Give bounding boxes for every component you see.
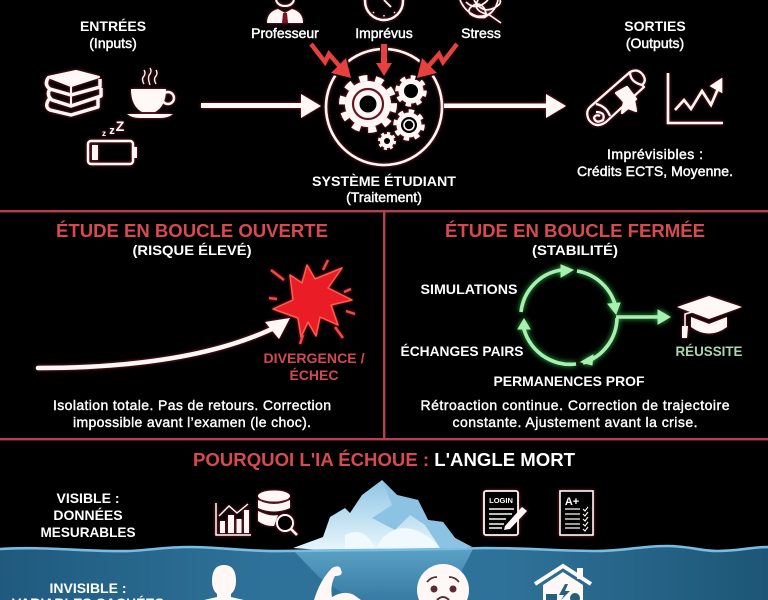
label: visible: VISIBLE :: [56, 490, 120, 506]
icon: low battery with sleep letters: z: [102, 129, 106, 138]
icon: flexed arm: [314, 566, 361, 600]
icon: diploma: [587, 71, 645, 125]
text: open loop description: [53, 397, 331, 430]
heading: inputs: [80, 18, 146, 51]
section dividers: [0, 210, 768, 440]
icon: worried face: [417, 564, 469, 600]
panel: open loop: [38, 220, 365, 430]
panel: iceberg blind spot: [0, 449, 768, 600]
icon: clock: [365, 0, 403, 20]
panel: closed loop: [400, 220, 742, 430]
water line: [0, 546, 768, 551]
icon: database search: [258, 490, 297, 535]
icon: graduation cap: [677, 296, 742, 338]
text: outputs: Crédits ECTS, Moyenne.: [577, 163, 733, 179]
icon: books: [46, 71, 101, 115]
text: closed loop description: Rétroaction continue. Correction de trajectoire: [420, 397, 730, 413]
text: open loop description: impossible avant l’examen (le choc).: [73, 414, 311, 430]
icon: tangled stress scribble: [460, 0, 501, 23]
heading: closed loop: (STABILITÉ): [532, 242, 618, 258]
icon: low battery with sleep letters: z: [109, 125, 115, 137]
arrow: professor lightning: [311, 44, 351, 78]
icon: bar chart: [216, 503, 251, 535]
iceberg: [293, 480, 472, 550]
label: divergence: DIVERGENCE /: [264, 350, 365, 366]
heading: blind spot: POURQUOI L'IA ÉCHOUE : L'ANGLE MORT: [193, 449, 575, 470]
perturbation: stress: [460, 0, 501, 41]
heading: inputs: (Inputs): [89, 35, 137, 51]
perturbation: professor: [251, 0, 319, 41]
heading: outputs: [624, 18, 686, 51]
label: system: SYSTÈME ÉTUDIANT: [312, 173, 456, 189]
heading: inputs: ENTRÉES: [80, 18, 146, 34]
arrow: diverging curve: [38, 318, 290, 368]
heading: closed loop: [445, 220, 705, 258]
icon: graded sheet: A+: [565, 496, 579, 508]
arrow: stress lightning: [417, 44, 457, 78]
icon: professor: [267, 0, 303, 23]
label: professor: Professeur: [251, 25, 319, 41]
icon: login document: [484, 491, 527, 535]
heading: outputs: (Outputs): [626, 35, 684, 51]
heading: open loop: [56, 220, 328, 258]
icon: graded sheet: [560, 491, 593, 535]
iceberg underwater: [293, 549, 473, 600]
label: invisible: INVISIBLE :: [49, 580, 127, 596]
text: open loop description: Isolation totale. Pas de retours. Correction: [53, 397, 331, 413]
label: unexpected: Imprévus: [355, 25, 413, 41]
label: peer exchange: ÉCHANGES PAIRS: [400, 343, 524, 359]
text: outputs: Imprévisibles :: [607, 146, 703, 162]
label: divergence: ÉCHEC: [289, 367, 339, 383]
arrow: system to outputs: [444, 94, 566, 118]
icon: explosion: [269, 260, 355, 344]
label: system: [312, 173, 456, 205]
label: visible: [40, 490, 136, 540]
panel: system inputs and outputs: [46, 0, 733, 205]
heading: open loop: ÉTUDE EN BOUCLE OUVERTE: [56, 220, 328, 241]
label: simulations: SIMULATIONS: [420, 281, 518, 297]
heading: closed loop: ÉTUDE EN BOUCLE FERMÉE: [445, 220, 705, 241]
label: office hours: PERMANENCES PROF: [494, 373, 645, 389]
system circle with gears: [326, 49, 442, 165]
label: success: RÉUSSITE: [676, 343, 742, 359]
text: closed loop description: [420, 397, 730, 430]
icon: small gear: [380, 134, 394, 148]
icon: low battery with sleep letters: Z: [116, 118, 125, 134]
icon: gear lower right: [395, 111, 423, 139]
label: stress: Stress: [461, 25, 501, 41]
arrow: inputs to system: [201, 94, 321, 118]
icon: rising chart: [668, 73, 723, 123]
perturbation: unexpected: [355, 0, 413, 41]
icon: gear upper right: [397, 77, 425, 105]
label: visible: DONNÉES: [53, 507, 123, 523]
icon: coffee cup: [127, 68, 174, 118]
label: visible: MESURABLES: [40, 524, 136, 540]
icon: low battery with sleep letters: [88, 118, 137, 164]
arrow: unexpected: [376, 44, 392, 76]
icon: damaged house: [535, 566, 591, 600]
heading: outputs: SORTIES: [624, 18, 686, 34]
label: divergence: [264, 350, 365, 383]
icon: large gear: [342, 78, 394, 130]
chart: feedback loop: [518, 265, 670, 365]
heading: open loop: (RISQUE ÉLEVÉ): [132, 242, 252, 258]
water: [0, 546, 768, 600]
label: invisible: [12, 580, 164, 600]
text: outputs: [577, 146, 733, 179]
icon: login document: LOGIN: [489, 496, 513, 505]
label: system: (Traitement): [346, 189, 422, 205]
text: closed loop description: constante. Ajustement avant la crise.: [452, 414, 698, 430]
icon: person silhouette: [204, 565, 244, 600]
